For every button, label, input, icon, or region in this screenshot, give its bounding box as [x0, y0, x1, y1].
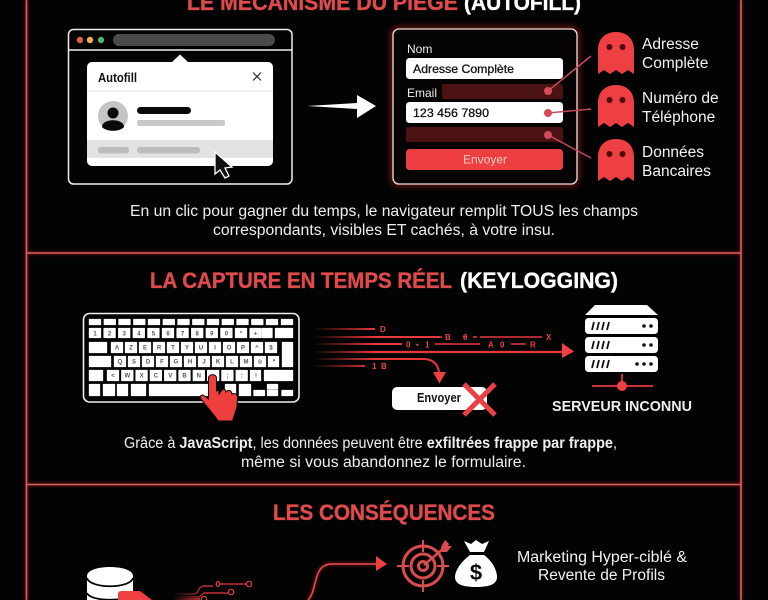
icon: pressing red hand [200, 375, 238, 421]
label: données bancaires: Données [642, 144, 704, 161]
key labels: 1234567890°+ [93, 332, 258, 338]
data streams [313, 325, 574, 384]
panel: form with hidden fields: Adresse Complète [413, 62, 514, 76]
text: keylogging explanation [124, 435, 617, 471]
label: numéro de téléphone: Numéro de [642, 90, 719, 107]
label: marketing hyper-ciblé [517, 549, 688, 584]
panel: form with hidden fields: Email [407, 86, 437, 100]
circuit traces [172, 581, 252, 600]
label: données bancaires [642, 144, 711, 180]
icon: ghost 1 [598, 32, 634, 74]
data streams: 0 [500, 340, 505, 350]
icon: database [87, 567, 152, 600]
key labels: QSDFGHJKLMù* [118, 360, 276, 366]
data streams: R [530, 340, 536, 350]
title: la capture en temps réel [150, 268, 618, 293]
title: les conséquences: LES CONSÉQUENCES [273, 500, 495, 525]
label: numéro de téléphone [642, 90, 719, 126]
autofill popup [87, 54, 273, 166]
title: la capture en temps réel: (KEYLOGGING) [460, 268, 618, 293]
label: numéro de téléphone: Téléphone [642, 109, 715, 126]
icon: money bag: $ [470, 560, 482, 585]
panel: form with hidden fields: 123 456 7890 [413, 106, 489, 120]
keyboard [84, 314, 299, 421]
data streams: 0 [463, 333, 468, 342]
data streams: B [381, 362, 387, 371]
blocked send button [392, 384, 495, 415]
icon: ghost 2 [598, 85, 634, 127]
text: autofill explanation [130, 203, 638, 239]
label: adresse complète: Adresse [642, 36, 699, 53]
text: autofill explanation: En un clic pour gagner du temps, le navigateur remplit TOUS les champs [130, 203, 638, 220]
label: marketing hyper-ciblé: Marketing Hyper-ciblé & [517, 549, 688, 566]
panel: form with hidden fields: Envoyer [463, 152, 507, 166]
text: keylogging explanation: Grâce à JavaScript, les données peuvent être exfiltrées frappe par frappe, [124, 435, 617, 452]
key labels [93, 332, 276, 380]
data streams: 1 [425, 340, 430, 350]
icon: mouse cursor [215, 152, 232, 178]
panel: browser autofill window [68, 30, 292, 184]
data streams: A [488, 340, 494, 350]
key labels: <WXCVBN,;:! [111, 374, 257, 380]
data streams: • [416, 340, 419, 350]
title: la capture en temps réel: LA CAPTURE EN TEMPS RÉEL [150, 268, 452, 293]
icon: red cross [464, 384, 495, 415]
icon: target [397, 540, 452, 592]
panel: form with hidden fields [393, 29, 591, 184]
icon: unknown server [585, 305, 658, 391]
arrow: browser to form [307, 95, 376, 118]
data streams: 0 [406, 340, 411, 350]
key labels: AZERTYUIOP^$ [115, 346, 273, 352]
label: adresse complète: Complète [642, 55, 708, 72]
text: autofill explanation: correspondants, visibles ET cachés, à votre insu. [213, 222, 555, 239]
panel: form with hidden fields: Nom [407, 42, 432, 56]
red data tag [118, 591, 152, 600]
autofill popup: Autofill [98, 70, 137, 85]
data streams: 1 [372, 362, 377, 371]
blocked send button: Envoyer [417, 390, 461, 405]
data streams: D [380, 325, 386, 334]
label: adresse complète [642, 36, 708, 72]
label: données bancaires: Bancaires [642, 163, 711, 180]
data streams: B [445, 333, 451, 342]
icon: money bag [455, 540, 497, 587]
icon: ghost 3 [598, 139, 634, 181]
text: keylogging explanation: même si vous abandonnez le formulaire. [241, 454, 526, 471]
arrow: curved to consequences [308, 556, 387, 600]
label: marketing hyper-ciblé: Revente de Profils [538, 567, 665, 584]
label: serveur inconnu: SERVEUR INCONNU [552, 398, 692, 415]
data streams: X [546, 333, 552, 342]
